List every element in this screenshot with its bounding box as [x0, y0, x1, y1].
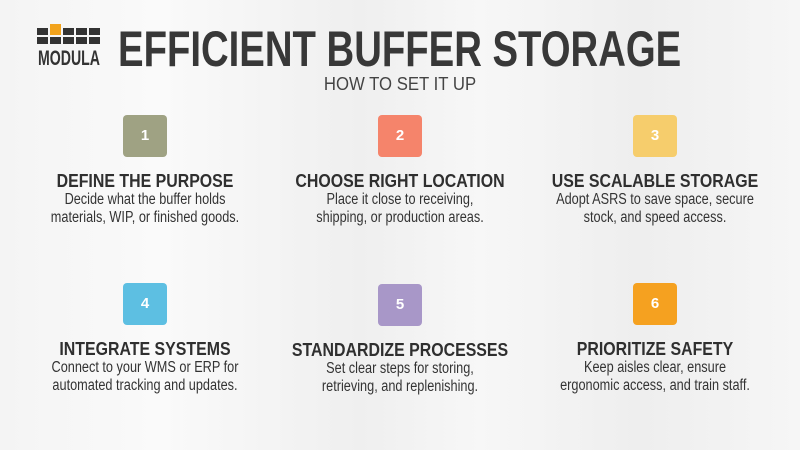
- item 3: USE SCALABLE STORAGE: [552, 170, 758, 191]
- item 5: 5: [396, 296, 404, 313]
- item 5: Set clear steps for storing,: [326, 360, 474, 377]
- item 2: 2: [396, 127, 404, 144]
- item 2: [295, 115, 505, 226]
- item 5: [292, 284, 508, 395]
- item 6: 6: [651, 295, 659, 312]
- item 6: [560, 283, 750, 394]
- subtitle: HOW TO SET IT UP: [324, 74, 476, 94]
- item 4: automated tracking and updates.: [52, 377, 238, 394]
- item 1: [51, 115, 239, 226]
- item 4: Connect to your WMS or ERP for: [52, 359, 238, 376]
- item 5: STANDARDIZE PROCESSES: [292, 339, 508, 360]
- item 4: 4: [141, 295, 149, 312]
- item 3: stock, and speed access.: [584, 209, 726, 226]
- item 2: shipping, or production areas.: [316, 209, 484, 226]
- item 1: Decide what the buffer holds: [65, 191, 225, 208]
- item 4: INTEGRATE SYSTEMS: [59, 338, 231, 359]
- item 6: ergonomic access, and train staff.: [560, 377, 750, 394]
- item 2: CHOOSE RIGHT LOCATION: [295, 170, 505, 191]
- logo: [37, 24, 100, 68]
- item 1: materials, WIP, or finished goods.: [51, 209, 239, 226]
- title: EFFICIENT BUFFER STORAGE: [118, 21, 682, 77]
- item 3: [552, 115, 758, 226]
- item 3: 3: [651, 127, 659, 144]
- item 1: DEFINE THE PURPOSE: [57, 170, 233, 191]
- item 6: Keep aisles clear, ensure: [584, 359, 726, 376]
- item 3: Adopt ASRS to save space, secure: [556, 191, 754, 208]
- item 1: 1: [141, 127, 149, 144]
- item 4: [52, 283, 238, 394]
- item 5: retrieving, and replenishing.: [322, 378, 478, 395]
- item 6: PRIORITIZE SAFETY: [577, 338, 733, 359]
- item 2: Place it close to receiving,: [327, 191, 473, 208]
